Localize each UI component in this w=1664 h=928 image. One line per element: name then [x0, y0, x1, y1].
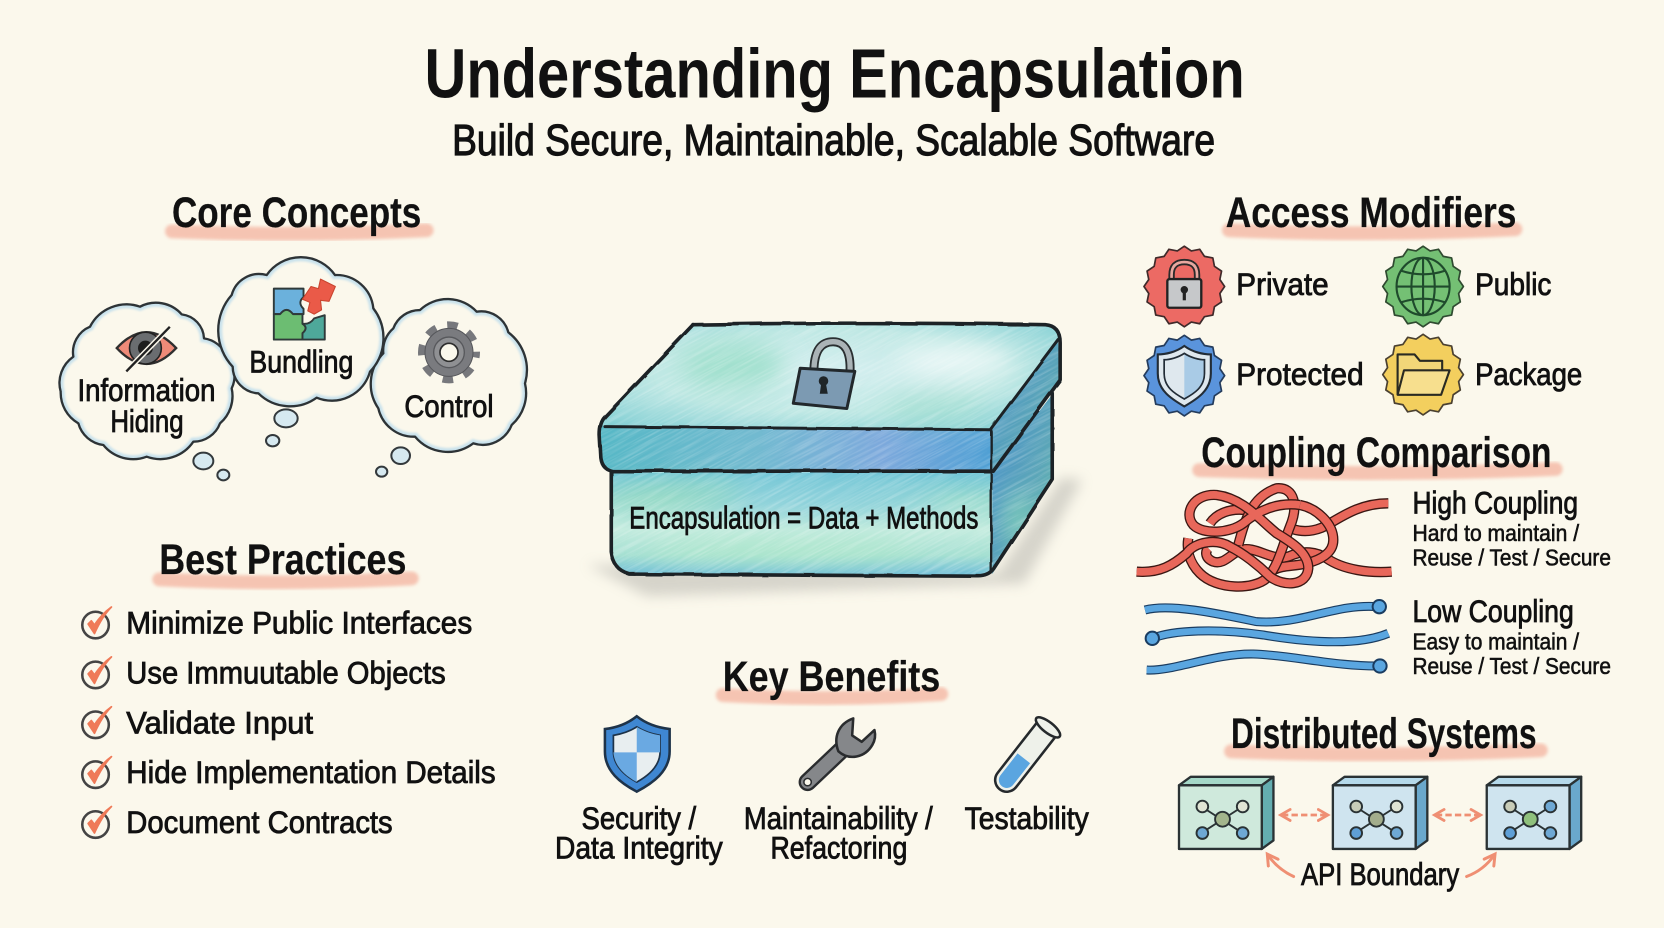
icon: wrench	[804, 718, 875, 786]
cloud: control	[371, 299, 527, 477]
icon: tangled red knot	[1137, 488, 1392, 587]
low coupling text	[1412, 593, 1611, 679]
cloud: bundling	[218, 257, 383, 446]
modifier: package: Package	[1475, 356, 1582, 392]
practice item 2: Use Immuutable Objects	[126, 654, 446, 690]
title: Understanding Encapsulation	[425, 35, 1245, 113]
icon: crossed-out eye	[117, 327, 176, 371]
service cube 1	[1179, 777, 1273, 849]
arrow: api boundary left	[1268, 855, 1294, 877]
modifier: package	[1383, 334, 1582, 415]
panel: key benefits	[555, 653, 1089, 865]
cloud: control: Control	[404, 388, 493, 424]
benefit: security: Data Integrity	[555, 829, 723, 865]
high coupling text: Hard to maintain /	[1412, 520, 1580, 546]
cloud: information hiding: Hiding	[110, 403, 184, 439]
heading: coupling comparison: Coupling Comparison	[1201, 429, 1551, 476]
icon: test tube	[988, 714, 1063, 798]
low coupling text: Easy to maintain /	[1412, 628, 1580, 654]
modifier: public	[1383, 246, 1552, 327]
cloud: bundling: Bundling	[249, 343, 353, 379]
benefit: testability: Testability	[965, 800, 1089, 836]
subtitle: Build Secure, Maintainable, Scalable Software	[452, 117, 1215, 165]
practice item 3: Validate Input	[126, 704, 313, 740]
icon: shield	[605, 716, 670, 792]
icon: puzzle	[274, 279, 335, 340]
high coupling text	[1412, 485, 1611, 571]
arrow: cube 2 to cube 3	[1436, 814, 1479, 816]
practice item 1: Minimize Public Interfaces	[126, 605, 472, 641]
box shadow	[587, 478, 1082, 596]
benefit: security: Security /	[582, 800, 696, 836]
practice item 4: Hide Implementation Details	[126, 754, 496, 790]
icon: three separate blue lines	[1145, 600, 1388, 673]
cloud: information hiding	[59, 303, 234, 480]
arrow: api boundary right	[1467, 855, 1494, 877]
benefit: testability	[965, 714, 1089, 836]
modifier: private: Private	[1236, 266, 1329, 302]
benefit: maintainability: Maintainability /	[744, 800, 933, 836]
practice item 5: Document Contracts	[126, 804, 393, 840]
modifier: private	[1144, 246, 1329, 327]
panel: access modifiers	[1144, 189, 1582, 416]
heading: key benefits: Key Benefits	[723, 653, 940, 700]
heading: distributed systems: Distributed Systems	[1231, 710, 1537, 757]
cloud: information hiding: Information	[78, 372, 215, 408]
box body and lid	[597, 321, 1062, 578]
modifier: protected: Protected	[1236, 356, 1364, 392]
low coupling text: Low Coupling	[1412, 593, 1574, 629]
high coupling text: High Coupling	[1412, 485, 1578, 521]
panel: distributed systems	[1179, 710, 1581, 892]
heading: core concepts: Core Concepts	[172, 189, 421, 236]
benefit: maintainability	[744, 718, 933, 865]
arrow: cube 1 to cube 2	[1282, 814, 1327, 816]
modifier: protected	[1144, 335, 1364, 416]
benefit: maintainability: Refactoring	[770, 829, 907, 865]
service cube 2	[1333, 777, 1427, 849]
panel: core concepts	[59, 189, 527, 480]
low coupling text: Reuse / Test / Secure	[1412, 653, 1611, 679]
icon: padlock on lid	[793, 342, 855, 409]
panel: best practices	[82, 536, 496, 840]
icon: gear	[423, 326, 475, 378]
box label: Encapsulation = Data + Methods	[629, 499, 978, 535]
heading: access modifiers: Access Modifiers	[1226, 189, 1516, 236]
modifier: public: Public	[1475, 266, 1552, 302]
service cube 3	[1487, 777, 1581, 849]
panel: coupling comparison	[1137, 429, 1611, 679]
central box illustration	[594, 321, 1082, 601]
high coupling text: Reuse / Test / Secure	[1412, 545, 1611, 571]
api boundary label: API Boundary	[1301, 856, 1459, 892]
heading: best practices: Best Practices	[159, 536, 406, 583]
benefit: security	[555, 716, 723, 865]
